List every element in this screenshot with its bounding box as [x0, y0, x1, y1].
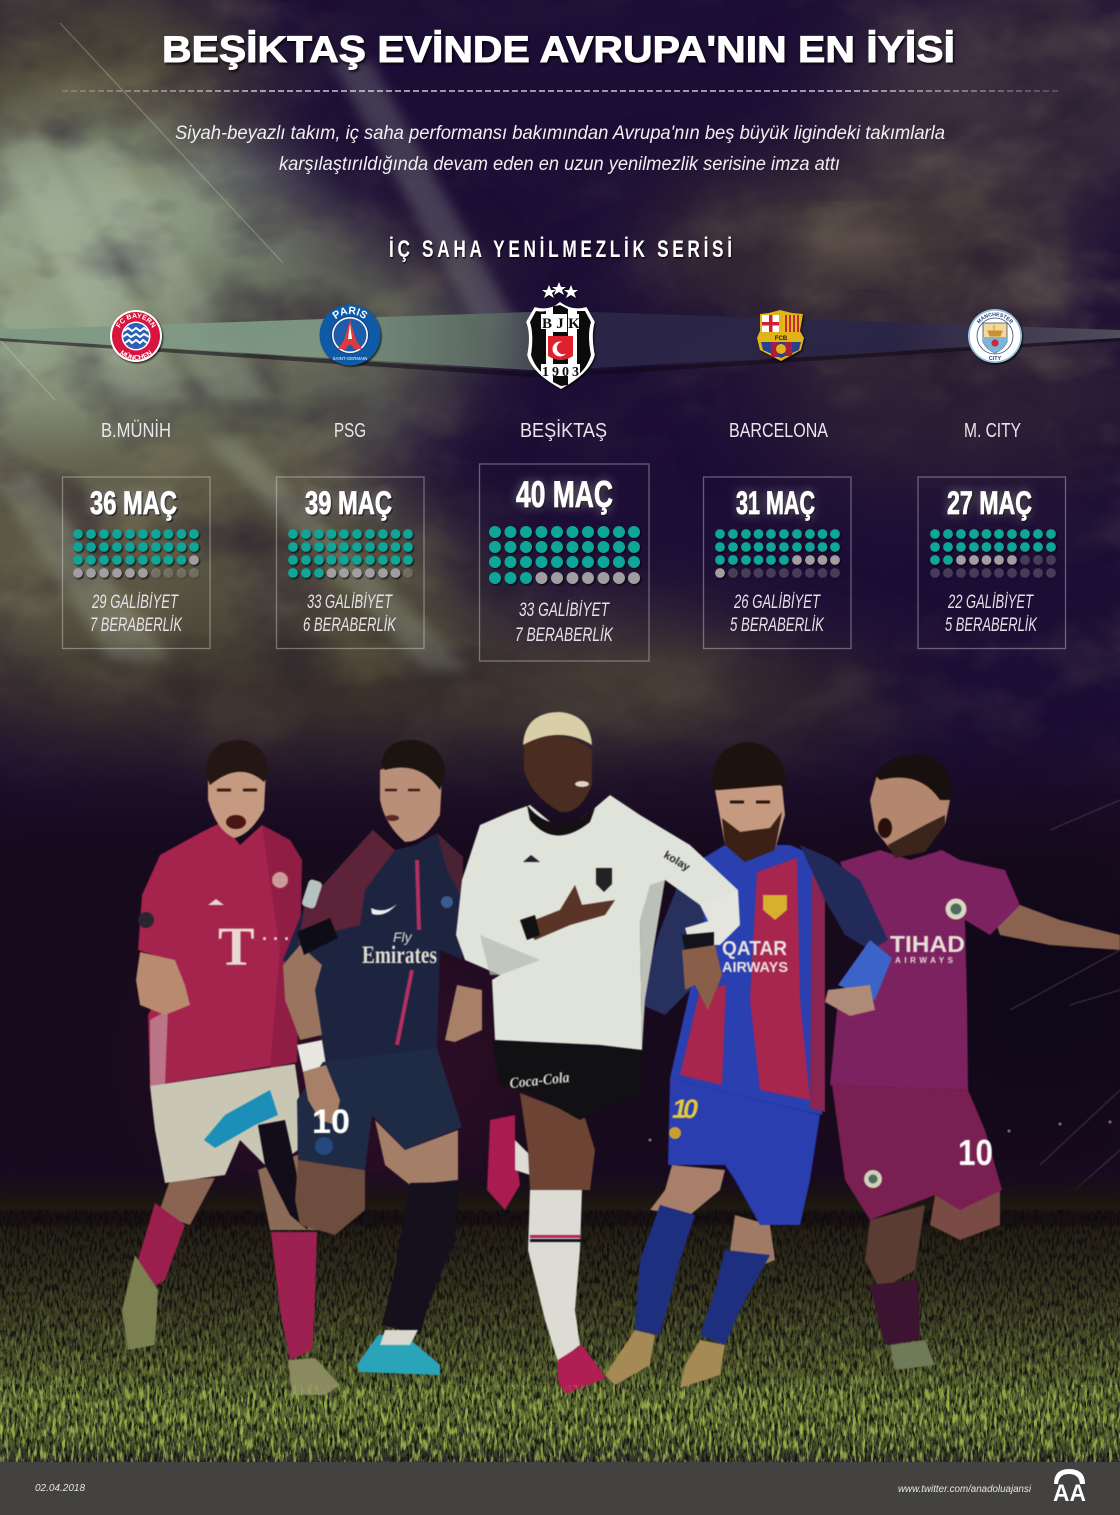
- panel: Bayern stats: [62, 477, 210, 648]
- intro text: karşılaştırıldığında devam eden en uzun yenilmezlik serisine imza attı: [279, 154, 840, 175]
- icon: Anadolu Agency logo: [1053, 1469, 1086, 1507]
- badge: PSG: [320, 304, 382, 368]
- team names: [101, 419, 1021, 442]
- panel: PSG stats: 6 BERABERLİK: [303, 615, 397, 636]
- player: PSG: 10: [312, 1103, 350, 1141]
- panel: Barcelona stats: 26 GALİBİYET: [733, 592, 821, 613]
- badge: Beşiktaş: [527, 282, 594, 388]
- player: PSG: Emirates: [362, 942, 437, 969]
- player: Barcelona: [605, 742, 892, 1388]
- badge: Bayern Munich: FC BAYERN: [116, 313, 156, 328]
- panel: Bayern stats: 36 MAÇ: [90, 485, 177, 521]
- player: Bayern Munich: T: [218, 916, 255, 977]
- intro text: Siyah-beyazlı takım, iç saha performansı bakımından Avrupa'nın beş büyük ligindeki takımlarla: [175, 123, 945, 144]
- title: BEŞİKTAŞ EVİNDE AVRUPA'NIN EN İYİSİ: [162, 29, 955, 70]
- player: PSG: Fly: [393, 929, 413, 945]
- team names: M. CITY: [964, 420, 1021, 442]
- panel: Barcelona stats: [704, 477, 851, 648]
- source url: www.twitter.com/anadoluajansi: [898, 1484, 1032, 1495]
- player: Bayern Munich: [122, 740, 340, 1395]
- intro text: [175, 123, 945, 175]
- panel: Manchester City stats: 22 GALİBİYET: [947, 592, 1034, 613]
- badge: Bayern Munich: MÜNCHEN: [120, 350, 152, 360]
- panel: Beşiktaş stats: 33 GALİBİYET: [519, 600, 610, 621]
- badge: Manchester City: CITY: [989, 356, 1002, 362]
- panel: PSG stats: 39 MAÇ: [305, 485, 392, 521]
- badge: Manchester City: MANCHESTER: [976, 312, 1013, 324]
- player: Beşiktaş: kolay: [662, 849, 693, 874]
- grass pitch: [0, 1170, 1120, 1465]
- player: Manchester City: [830, 755, 1120, 1370]
- background: stormy sky and stadium: [0, 0, 1120, 1188]
- panel: Manchester City stats: [918, 477, 1066, 648]
- grass foreground over boots: [0, 1385, 1120, 1462]
- panel: Beşiktaş stats: 7 BERABERLİK: [515, 625, 614, 646]
- badge: PSG: PARIS: [332, 306, 368, 319]
- badge: Beşiktaş: B: [542, 316, 552, 332]
- badge: Beşiktaş: J: [556, 316, 564, 332]
- team names: B.MÜNİH: [101, 419, 171, 442]
- section heading: İÇ SAHA YENİLMEZLİK SERİSİ: [389, 236, 732, 263]
- panel: Bayern stats: 29 GALİBİYET: [91, 592, 179, 613]
- dashed divider: [62, 90, 1058, 92]
- player: PSG: [283, 740, 482, 1375]
- team names: BEŞİKTAŞ: [520, 419, 607, 442]
- ribbon band behind badges: [0, 312, 1120, 377]
- player: Manchester City: AIRWAYS: [895, 956, 954, 965]
- panel: Manchester City stats: 27 MAÇ: [947, 485, 1032, 521]
- team names: PSG: [334, 420, 366, 442]
- player: Barcelona: AIRWAYS: [722, 959, 788, 976]
- badge: Beşiktaş: K: [568, 316, 580, 332]
- badge: PSG: SAINT-GERMAIN: [333, 356, 367, 361]
- badge: Manchester City: [968, 309, 1024, 365]
- player: Beşiktaş: Coca-Cola: [509, 1070, 571, 1092]
- team names: BARCELONA: [729, 420, 829, 442]
- badge: Beşiktaş: 1903: [542, 365, 579, 380]
- footer bar: [0, 1462, 1120, 1515]
- badge: Barcelona: [757, 310, 804, 361]
- panel: PSG stats: [276, 477, 424, 648]
- player: Bayern Munich: · · ·: [262, 929, 290, 949]
- panel: Manchester City stats: 5 BERABERLİK: [945, 615, 1038, 636]
- panel: PSG stats: 33 GALİBİYET: [307, 592, 393, 613]
- panel: Beşiktaş stats: [480, 464, 649, 661]
- panel: Beşiktaş stats: 40 MAÇ: [516, 474, 613, 515]
- panel: Bayern stats: 7 BERABERLİK: [90, 615, 183, 636]
- player: Manchester City: TIHAD: [890, 931, 965, 957]
- player: Barcelona: QATAR: [722, 938, 788, 960]
- date: 02.04.2018: [35, 1483, 85, 1494]
- icon: Anadolu Agency logo: AA: [1053, 1480, 1086, 1507]
- panel: Barcelona stats: 5 BERABERLİK: [730, 615, 825, 636]
- player: Manchester City: 10: [958, 1132, 993, 1173]
- player: Barcelona: 10: [672, 1094, 698, 1124]
- badge: Barcelona: FCB: [775, 336, 788, 342]
- panel: Barcelona stats: 31 MAÇ: [736, 485, 815, 521]
- player: Beşiktaş: [456, 712, 740, 1394]
- badge: Bayern Munich: [110, 310, 164, 364]
